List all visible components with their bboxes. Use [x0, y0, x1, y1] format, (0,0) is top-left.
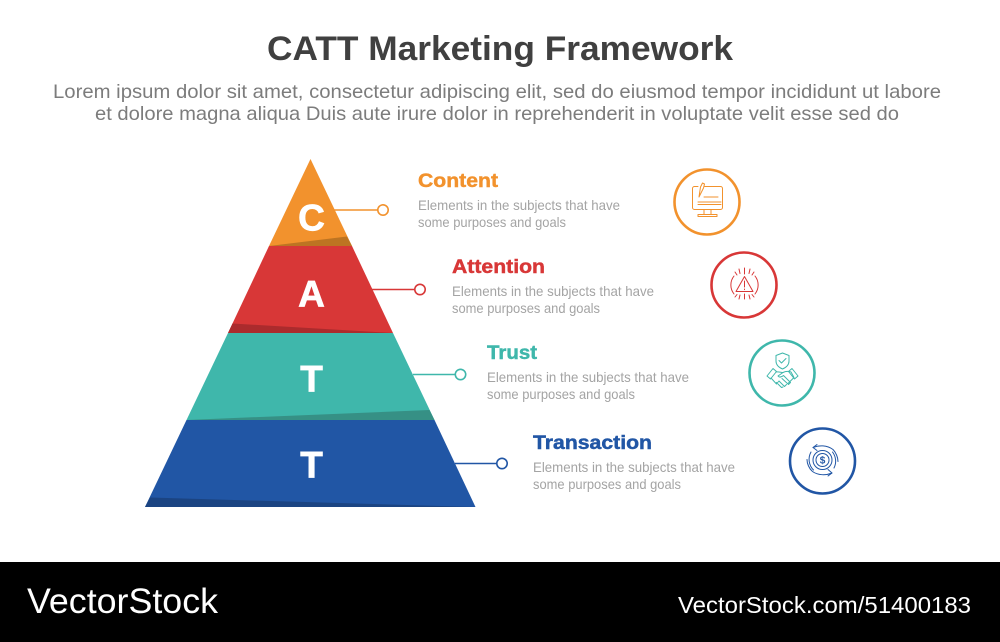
subtitle [53, 81, 941, 125]
icon: warning alert [712, 252, 776, 318]
pyramid level: Content [269, 159, 352, 246]
footer brand: VectorStock [27, 582, 219, 621]
text block: Attention: Elements in the subjects that have [452, 284, 654, 299]
connector: Attention [372, 284, 425, 295]
text block: Transaction [533, 433, 735, 492]
text block: Transaction: some purposes and goals [533, 477, 681, 492]
pyramid level: Transaction: T [300, 444, 323, 486]
text block: Content: Elements in the subjects that have [418, 198, 620, 213]
text block: Trust: Elements in the subjects that have [487, 370, 689, 385]
pyramid level: Content: C [298, 198, 325, 238]
title: CATT Marketing Framework [267, 30, 733, 68]
connector: Content [333, 205, 388, 215]
text block: Trust [487, 343, 689, 402]
footer image id: VectorStock.com/51400183 [678, 592, 971, 618]
icon: dollar coin with arrows [790, 428, 855, 494]
icon: computer with pen [674, 170, 740, 234]
text block: Content [418, 171, 620, 230]
icon: handshake and shield [750, 340, 814, 406]
subtitle: Lorem ipsum dolor sit amet, consectetur adipiscing elit, sed do eiusmod tempor incididunt ut labore [53, 81, 941, 103]
text block: Content: some purposes and goals [418, 215, 566, 230]
connector: Trust [413, 369, 466, 380]
subtitle: et dolore magna aliqua Duis aute irure dolor in reprehenderit in voluptate velit esse sed do [95, 103, 899, 125]
connector: Transaction [455, 458, 507, 469]
pyramid level: Transaction [145, 420, 476, 507]
text block: Trust: some purposes and goals [487, 387, 635, 402]
pyramid level: Attention [228, 246, 393, 333]
text block: Transaction: Transaction [533, 433, 652, 454]
pyramid level: Trust [186, 333, 434, 420]
pyramid level: Attention: A [298, 274, 325, 314]
text block: Content: Content [418, 171, 499, 192]
text block: Attention [452, 257, 654, 316]
text block: Attention: Attention [452, 257, 545, 278]
text block: Trust: Trust [487, 343, 538, 364]
footer bar [0, 562, 1000, 642]
icon: dollar coin with arrows: $ [820, 456, 826, 466]
pyramid level: Trust: T [300, 358, 323, 400]
pyramid [145, 159, 476, 507]
text block: Transaction: Elements in the subjects that have [533, 460, 735, 475]
text block: Attention: some purposes and goals [452, 301, 600, 316]
